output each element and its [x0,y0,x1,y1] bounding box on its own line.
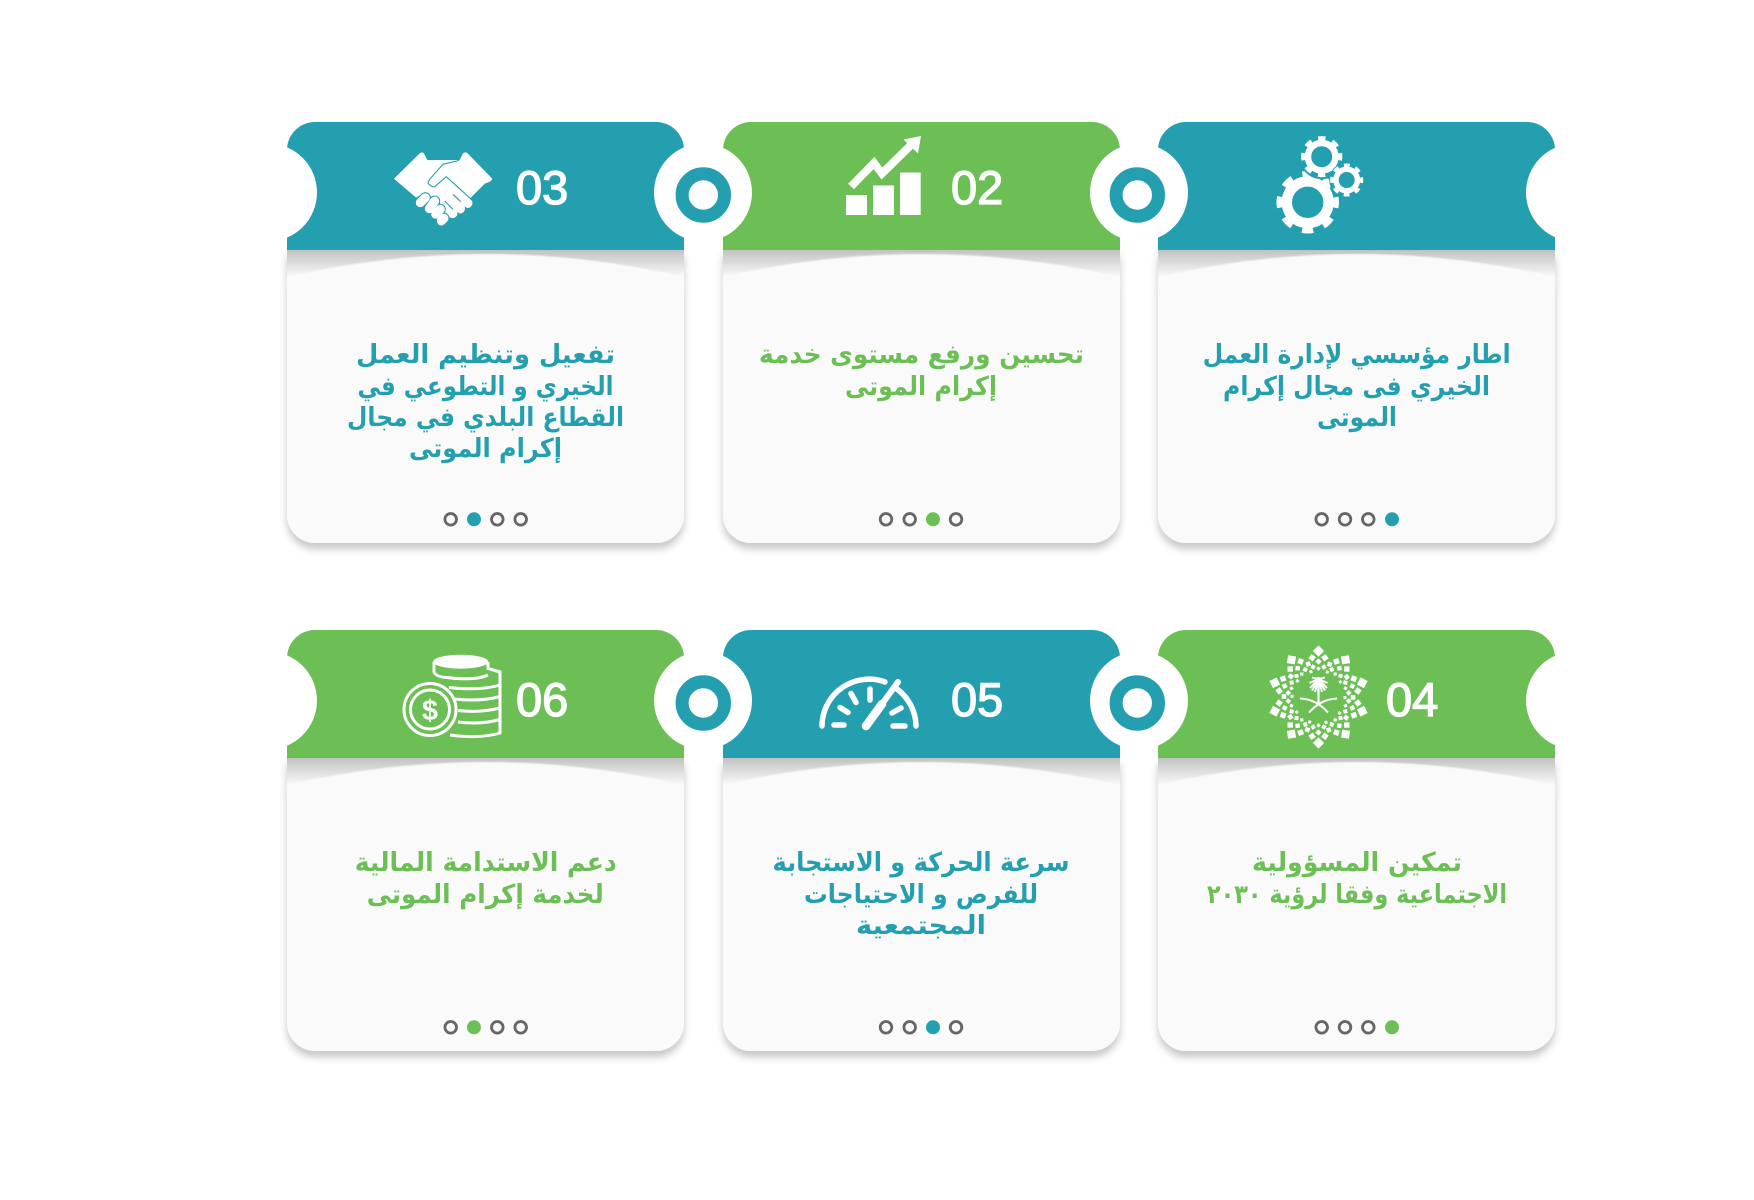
icon: growth chart [846,136,921,215]
icon: vision 2030 emblem [1265,645,1372,749]
text: سرعة الحركة و الاستجابة [772,848,1070,878]
card 02 [723,122,1120,543]
card 04 [1158,630,1555,1051]
text: اطار مؤسسي لإدارة العمل [1203,340,1511,370]
text [1207,848,1507,910]
text: الخيري فى مجال إكرام [1223,372,1490,402]
number 03: 03 [516,161,568,214]
card 06 [287,630,684,1051]
connector rings [682,174,1159,724]
icon: coin stack: $ [422,695,438,727]
text: الاجتماعية وفقا لرؤية ٢٠٣٠ [1207,880,1507,910]
text: إكرام الموتى [409,434,562,464]
icon: gears [1280,134,1364,230]
text: الخيري و التطوعي في [358,372,614,402]
text [759,340,1084,402]
text: دعم الاستدامة المالية [355,848,617,878]
icon: speedometer [822,679,916,726]
text: إكرام الموتى [845,372,997,402]
text: تفعيل وتنظيم العمل [356,340,615,370]
text [355,848,617,910]
card 01 [1158,122,1555,543]
pagination dots [1316,1020,1399,1034]
card 05 [723,630,1120,1051]
pagination dots [445,512,526,526]
text: تحسين ورفع مستوى خدمة [759,340,1084,370]
header notches [219,144,1624,750]
card 03 [287,122,684,543]
text: المجتمعية [856,911,986,941]
icon: coin stack [404,655,500,737]
pagination dots [1316,512,1399,526]
pagination dots [445,1020,526,1034]
number 02: 02 [951,161,1003,214]
number 05: 05 [951,673,1003,726]
number 06: 06 [516,673,568,726]
text: القطاع البلدي في مجال [347,403,624,433]
text [347,340,624,464]
pagination dots [880,512,962,526]
text [772,848,1070,941]
text: للفرص و الاحتياجات [804,880,1038,910]
text: تمكين المسؤولية [1252,848,1462,878]
pagination dots [880,1020,962,1034]
icon: handshake [394,152,492,221]
text: لخدمة إكرام الموتى [367,880,604,910]
text: الموتى [1317,403,1397,433]
text [1203,340,1511,433]
number 04: 04 [1386,673,1438,726]
